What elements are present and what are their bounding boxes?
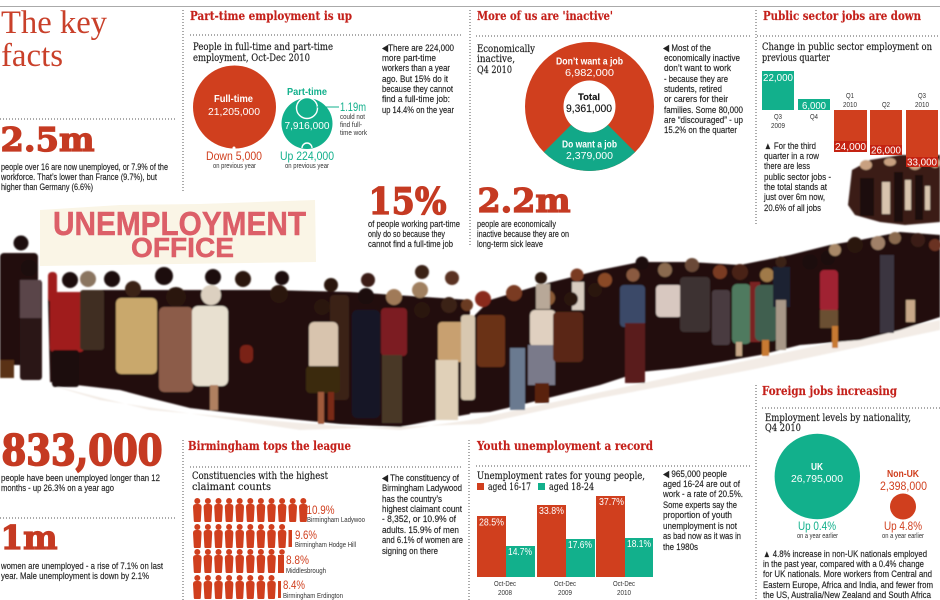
note: youth: aged 16-24 are out of: [663, 479, 740, 490]
note: Birmingham: - 8,352, or 10.9% of: [382, 514, 456, 525]
row: Birmingham Hodge Hill: 9.6%: [295, 530, 317, 542]
note: inactive: families. Some 80,000: [664, 105, 743, 116]
bar chart: public sector change: 6,000: [802, 100, 826, 112]
chart subtitle: [765, 413, 911, 434]
note: public sector: ▲ For the third: [764, 141, 816, 152]
left group: [0, 236, 475, 424]
note: youth: work - a rate of 20.5%.: [662, 489, 743, 500]
panel: youth unemployment: [476, 439, 743, 597]
note: youth: ◀ 965,000 people: [663, 469, 727, 480]
row: Birmingham Erdington: [193, 575, 343, 600]
bar chart: public sector change: Q3: [918, 93, 926, 100]
note: part-time: because they cannot: [382, 84, 453, 95]
bubble: UK: UK: [811, 461, 823, 473]
note: youth: as bad now as it was in: [663, 531, 741, 542]
bar chart: youth rates: Oct-Dec: [494, 581, 516, 588]
chart subtitle: Q4 2010: [477, 65, 512, 76]
note: foreign: [763, 549, 933, 600]
note: Birmingham: adults. 15.9% of men: [382, 525, 459, 536]
bubble: part-time: could not: [340, 114, 365, 121]
chart subtitle: [477, 44, 535, 76]
panel: Birmingham: [188, 439, 463, 600]
photo crowd: [0, 155, 940, 430]
bar chart: youth rates: 14.7%: [508, 546, 532, 558]
note: Birmingham: signing on there: [382, 546, 438, 557]
row: Birmingham Ladywood: Birmingham Ladywoo: [307, 517, 365, 524]
row: Middlesbrough: [193, 549, 326, 575]
donut chart: [525, 42, 654, 171]
note: youth: unemployment is not: [663, 521, 737, 532]
note: part-time: workers than a year: [381, 63, 451, 74]
stat: 15% part-time: of people working part-time: [368, 219, 460, 230]
chart subtitle: People in full-time and part-time: [193, 42, 333, 53]
row: Birmingham Erdington: Birmingham Erdington: [283, 593, 343, 600]
chart subtitle: Economically: [477, 44, 535, 55]
note: Birmingham: has the country’s: [382, 494, 442, 505]
donut chart: Don’t want a job: [556, 56, 623, 68]
bar chart: public sector change: Q1: [846, 93, 854, 100]
note: inactive: - because they are: [664, 74, 728, 85]
bar chart: youth rates: 37.7%: [599, 496, 624, 508]
heading: Part-time employment is up: [190, 9, 352, 23]
bar chart: public sector change: 2010: [915, 102, 929, 109]
bar chart: youth rates: 18.1%: [627, 538, 651, 550]
bubble: UK: on a year earlier: [797, 533, 839, 540]
row: Birmingham Ladywood: 10.9%: [306, 505, 334, 517]
note: inactive: 15.2% on the quarter: [664, 125, 738, 136]
bubble: full-time: on previous year: [213, 163, 257, 170]
pictogram chart: [193, 498, 365, 600]
note: part-time: more part-time: [382, 53, 436, 64]
bar chart: youth rates: Oct-Dec: [554, 581, 576, 588]
donut chart: Total: [578, 92, 600, 103]
heading: Birmingham tops the league: [188, 439, 351, 453]
bubble: non-UK: Non-UK: [887, 468, 919, 480]
note: public sector: public sector jobs -: [764, 172, 831, 183]
note: inactive: are “discouraged” - up: [664, 115, 743, 126]
note: youth: proportion of youth: [663, 510, 732, 521]
stat: 2.2m sick leave: people are economically: [477, 219, 556, 230]
chart subtitle: [192, 471, 328, 493]
legend: [477, 482, 594, 493]
stat: 15% part-time: only do so because they: [368, 229, 445, 240]
bubble: part-time: 7,916,000: [284, 120, 330, 132]
bar chart: public sector change: Q4: [810, 114, 818, 121]
bar chart: public sector change: 2010: [843, 102, 857, 109]
chart subtitle: Constituencies with the highest: [192, 471, 328, 482]
note: part-time: [381, 43, 455, 116]
row: Birmingham Hodge Hill: [193, 524, 356, 549]
bar chart: youth rates: 28.5%: [479, 516, 504, 528]
bar chart: public sector change: 24,000: [835, 141, 866, 153]
row: Birmingham Erdington: 8.4%: [283, 580, 305, 592]
photo sign: unemployment office: OFFICE: [131, 232, 234, 263]
bubble: part-time: time work: [340, 130, 367, 137]
stat: 2.2m sick leave: long-term sick leave: [477, 239, 543, 250]
note: inactive: [663, 43, 743, 136]
stat: 2.5m unemployed: higher than Germany (6.6%): [1, 182, 93, 193]
note: Birmingham: Birmingham Ladywood: [382, 483, 462, 494]
bubble: non-UK: on a year earlier: [882, 533, 925, 540]
stat: 2.5m unemployed: people over 16 are now unemployed, or 7.9% of the: [1, 162, 168, 173]
bubble: part-time: Up 224,000: [280, 151, 334, 163]
chart subtitle: Employment levels by nationality,: [765, 413, 911, 424]
note: public sector: 20.6% of all jobs: [764, 203, 821, 214]
bar chart: public sector change: Q2: [882, 102, 890, 109]
stat: 1m women: [0, 518, 163, 582]
stat: 2.5m unemployed: workforce. That’s lower than France (9.7%), but: [0, 172, 157, 183]
stat: 2.2m sick leave: inactive because they are on: [477, 229, 569, 240]
note: inactive: economically inactive: [664, 53, 740, 64]
bar chart: youth rates: Oct-Dec: [613, 581, 635, 588]
panel: foreign jobs: [762, 384, 933, 600]
bubble: UK: Up 0.4%: [798, 521, 836, 533]
panel: public sector jobs: [762, 9, 938, 214]
stat: 15% part-time: [368, 181, 460, 250]
bubble: full-time: 21,205,000: [208, 106, 260, 118]
chart subtitle: Unemployment rates for young people,: [477, 471, 645, 482]
note: public sector: just over 6m now,: [763, 192, 825, 203]
chart subtitle: Q4 2010: [765, 423, 801, 434]
bubble: full-time: Down 5,000: [206, 151, 262, 163]
bar chart: public sector change: [762, 71, 938, 168]
note: part-time: ◀There are 224,000: [382, 43, 454, 54]
note: part-time: ago. But 15% do it: [382, 74, 448, 85]
bar chart: public sector change: 2009: [771, 123, 785, 130]
note: Birmingham: highest claimant count: [382, 504, 462, 515]
bar chart: public sector change: 22,000: [763, 72, 793, 84]
title: The key: [1, 5, 107, 41]
bar chart: youth rates: [477, 496, 653, 597]
note: inactive: students, retired: [664, 84, 722, 95]
note: public sector: quarter in a row: [764, 151, 819, 162]
note: public sector: the total stands at: [764, 182, 827, 193]
bubble: non-UK: Up 4.8%: [884, 521, 922, 533]
stat: 2.2m sick leave: 2.2m: [478, 181, 571, 220]
bubble: UK: [775, 434, 860, 540]
note: part-time: up 14.4% on the year: [382, 105, 455, 116]
stat: 1m women: year. Male unemployment is down by 2.1%: [1, 571, 149, 582]
donut chart: 6,982,000: [565, 67, 614, 79]
bubble: part-time: on previous year: [285, 163, 330, 170]
note: youth: the 1980s: [663, 542, 698, 553]
stat: 833,000 long-term: [1, 426, 162, 494]
stat: 2.2m sick leave: [477, 181, 571, 250]
note: Birmingham: ◀ The constituency of: [382, 473, 459, 484]
bubble: full-time: Full-time: [214, 93, 253, 105]
legend: aged 16-17: [488, 482, 531, 493]
bar chart: public sector change: Q3: [774, 114, 782, 121]
bar chart: youth rates: 2008: [498, 590, 512, 597]
title: facts: [1, 38, 63, 74]
row: Birmingham Ladywood: [193, 498, 365, 524]
photo: unemployment office queue: [0, 155, 940, 430]
bubble: non-UK: 2,398,000: [880, 481, 927, 493]
note: youth: [662, 469, 743, 553]
stat: 15% part-time: 15%: [368, 181, 446, 223]
chart subtitle: [193, 42, 333, 64]
chart subtitle: inactive,: [477, 54, 515, 65]
bar chart: public sector change: 33,000: [907, 156, 937, 168]
note: inactive: don’t want to work: [664, 63, 731, 74]
right group: [475, 232, 940, 410]
bar chart: youth rates: 2010: [617, 590, 631, 597]
note: part-time: find a full-time job:: [382, 94, 450, 105]
bubble: UK: 26,795,000: [791, 473, 843, 485]
panel: part-time employment: [190, 9, 455, 170]
note: inactive: ◀ Most of the: [663, 43, 711, 54]
row: Birmingham Hodge Hill: Birmingham Hodge Hill: [295, 542, 356, 549]
stat: 1m women: women are unemployed - a rise of 7.1% on last: [0, 561, 163, 572]
photo sign: unemployment office: [40, 200, 316, 266]
bubble: part-time: 1.19m: [340, 102, 366, 114]
bubble: full-time: [193, 66, 276, 170]
donut chart: Do want a job: [562, 138, 617, 150]
bubble: part-time: [280, 86, 367, 170]
bubble: part-time: find full-: [340, 122, 363, 129]
bar chart: youth rates: 17.6%: [568, 539, 592, 551]
bar chart: public sector change: 26,000: [871, 144, 901, 156]
legend: aged 18-24: [549, 482, 594, 493]
note: youth: Some experts say the: [663, 500, 737, 511]
row: Middlesbrough: Middlesbrough: [286, 568, 326, 575]
stat: 2.5m unemployed: 2.5m: [0, 120, 95, 159]
stat: 833,000 long-term: 833,000: [2, 426, 162, 475]
chart subtitle: previous quarter: [762, 53, 830, 64]
heading: Youth unemployment a record: [476, 439, 654, 453]
donut chart: 2,379,000: [566, 150, 613, 162]
heading: More of us are 'inactive': [477, 9, 613, 23]
bubble: part-time: Part-time: [287, 86, 327, 98]
chart subtitle: employment, Oct-Dec 2010: [193, 53, 310, 64]
stat: 2.5m unemployed: [0, 120, 168, 193]
stat: 833,000 long-term: people have been unemployed longer than 12: [1, 473, 160, 484]
stat: 15% part-time: cannot find a full-time job: [368, 239, 453, 250]
note: public sector: there are less: [764, 161, 810, 172]
note: Birmingham: and 6.1% of women are: [382, 535, 463, 546]
panel: economically inactive: [477, 9, 743, 171]
chart subtitle: [762, 42, 932, 64]
note: inactive: or carers for their: [664, 94, 729, 105]
bar chart: youth rates: 33.8%: [539, 505, 564, 517]
heading: Foreign jobs increasing: [762, 384, 898, 398]
title: [1, 5, 107, 74]
stat: 1m women: 1m: [0, 518, 58, 557]
note: Birmingham: [382, 473, 463, 557]
bar chart: youth rates: 2009: [558, 590, 572, 597]
bubble: non-UK: [880, 468, 927, 540]
chart subtitle: claimant counts: [192, 482, 271, 493]
photo sign: unemployment office: UNEMPLOYMENT: [53, 205, 306, 242]
donut chart: 9,361,000: [566, 103, 612, 115]
note: public sector: [763, 141, 831, 214]
stat: 833,000 long-term: months - up 26.3% on a year ago: [1, 483, 114, 494]
row: Middlesbrough: 8.8%: [286, 555, 309, 567]
